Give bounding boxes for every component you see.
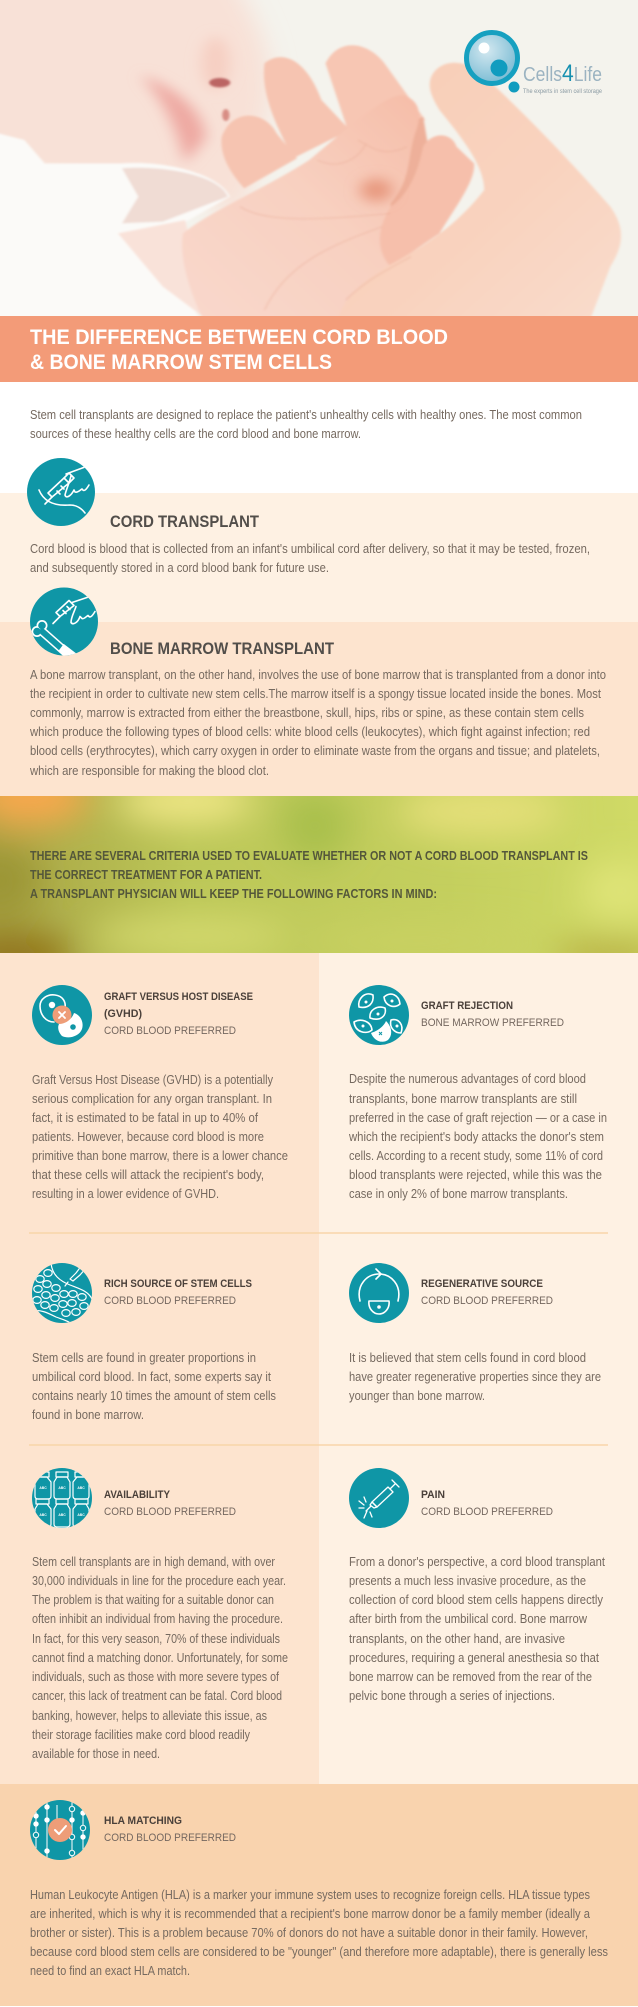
pain text: after birth from the umbilical cord. Bone marrow (349, 1612, 588, 1626)
bone marrow text: commonly, marrow is extracted from either the breastbone, skull, hips, ribs or spine, as these contain stem cells (30, 706, 584, 720)
availability text: often inhibit an individual from having the procedure. (32, 1612, 283, 1626)
bone marrow text (29, 668, 606, 778)
HLA text: need to find an exact HLA match. (30, 1964, 190, 1978)
availability text: Stem cell transplants are in high demand, with over (32, 1555, 275, 1569)
rich source text: umbilical cord blood. In fact, some experts say it (32, 1370, 271, 1384)
bone marrow text: which produce the following types of blood cells: white blood cells (leukocytes), which fight against infection; red (29, 725, 590, 739)
heading: graft rejection: GRAFT REJECTION (421, 1000, 513, 1012)
panel: criteria banner on blurred green background (0, 766, 638, 978)
heading: HLA matching: CORD BLOOD PREFERRED (104, 1832, 236, 1844)
graft rejection text: transplants, bone marrow transplants are still (349, 1092, 577, 1106)
icon: syringe and umbilical cord (27, 458, 95, 526)
title: & BONE MARROW STEM CELLS (30, 350, 332, 374)
heading: regenerative source: CORD BLOOD PREFERRED (421, 1295, 553, 1307)
intro text: sources of these healthy cells are the cord blood and bone marrow. (30, 427, 361, 441)
panel: factors left column background (0, 953, 319, 1784)
factor: pain (349, 1468, 605, 1703)
pain text: bone marrow can be removed from the rear of the (349, 1670, 592, 1684)
graft rejection text: case in only 2% of bone marrow transplants. (349, 1187, 568, 1201)
icon: storage vials: ABC (39, 1513, 47, 1517)
availability text: individuals, such as those with more severe types of (32, 1670, 279, 1684)
cord transplant text: and subsequently stored in a cord blood bank for future use. (30, 561, 329, 575)
icon: cells in blood vessel with syringe (32, 1263, 92, 1327)
availability text: The problem is that waiting for a suitable donor can (32, 1593, 274, 1607)
icon: storage vials: ABC (77, 1486, 85, 1490)
GVHD text: primitive than bone marrow, there is a lower chance (32, 1149, 288, 1163)
heading: regenerative source: REGENERATIVE SOURCE (421, 1278, 543, 1290)
cord transplant text (30, 542, 590, 575)
regenerative source text (349, 1351, 601, 1403)
icon: storage vials (32, 1468, 92, 1528)
heading: availability (104, 1489, 236, 1518)
GVHD text: patients. However, because cord blood is more (32, 1130, 264, 1144)
rich source text: found in bone marrow. (32, 1408, 144, 1422)
intro text: Stem cell transplants are designed to replace the patient's unhealthy cells with healthy ones. The most common (30, 408, 582, 422)
factor: rich source of stem cells (32, 1263, 276, 1422)
pain text: transplants, on the other hand, are invasive (349, 1632, 565, 1646)
title banner (0, 316, 638, 382)
cord transplant text: Cord blood is blood that is collected from an infant's umbilical cord after delivery, so that it may be tested, frozen, (30, 542, 590, 556)
panel: factors right column background (319, 953, 638, 1784)
title (30, 325, 448, 374)
graft rejection text: preferred in the case of graft rejection — or a case in (349, 1111, 607, 1125)
photo: baby's hand held in adult hand (0, 0, 638, 320)
icon: storage vials: ABC (39, 1486, 47, 1490)
heading: rich source (104, 1278, 252, 1307)
GVHD text: Graft Versus Host Disease (GVHD) is a potentially (32, 1073, 274, 1087)
title: THE DIFFERENCE BETWEEN CORD BLOOD (30, 325, 448, 349)
heading: cord transplant: CORD TRANSPLANT (110, 513, 259, 531)
heading: pain (421, 1489, 553, 1518)
graft rejection text: which the recipient's body attacks the donor's stem (348, 1130, 604, 1144)
criteria text (30, 848, 588, 901)
graft rejection text (348, 1072, 607, 1201)
availability text: banking, however, helps to alleviate this issue, as (32, 1709, 267, 1723)
icon: storage vials: ABC (77, 1513, 85, 1517)
regenerative source text: It is believed that stem cells found in cord blood (349, 1351, 586, 1365)
icon: storage vials: ABC (58, 1513, 66, 1517)
pain text: collection of cord blood stem cells happens directly (349, 1593, 604, 1607)
panel: bone marrow transplant (0, 588, 638, 796)
graft rejection text: blood transplants were rejected, while this was the (349, 1168, 602, 1182)
heading: availability: AVAILABILITY (104, 1489, 171, 1501)
heading: GVHD: (GVHD) (104, 1008, 142, 1020)
pain text (349, 1555, 605, 1703)
heading: graft rejection: BONE MARROW PREFERRED (421, 1017, 564, 1029)
availability text: 30,000 individuals in line for the procedure each year. (32, 1574, 286, 1588)
heading: rich source: RICH SOURCE OF STEM CELLS (104, 1278, 252, 1290)
GVHD text (32, 1073, 288, 1201)
heading: HLA matching (104, 1815, 236, 1844)
heading: graft rejection (421, 1000, 564, 1029)
heading: GVHD: GRAFT VERSUS HOST DISEASE (104, 991, 253, 1003)
heading: pain: CORD BLOOD PREFERRED (421, 1506, 553, 1518)
icon: syringe and bone (30, 588, 98, 656)
icon: storage vials: ABC (58, 1486, 66, 1490)
heading: pain: PAIN (421, 1489, 445, 1501)
regenerative source text: younger than bone marrow. (349, 1389, 485, 1403)
icon: graft rejection cells (349, 985, 409, 1045)
icon: DNA strands with check (30, 1800, 90, 1860)
panel: cord transplant (0, 458, 638, 622)
factor: availability (32, 1468, 288, 1761)
criteria text: THE CORRECT TREATMENT FOR A PATIENT. (30, 867, 262, 882)
availability text: cannot find a matching donor. Unfortunately, for some (32, 1651, 288, 1665)
criteria text: A TRANSPLANT PHYSICIAN WILL KEEP THE FOLLOWING FACTORS IN MIND: (30, 886, 437, 901)
pain text: procedures, requiring a general anesthesia so that (349, 1651, 599, 1665)
pain text: From a donor's perspective, a cord blood transplant (349, 1555, 605, 1569)
logo: Cells4Life: The experts in stem cell storage (523, 88, 602, 95)
pain text: pelvic bone through a series of injections. (349, 1689, 555, 1703)
pain text: presents a much less invasive procedure, as the (349, 1574, 586, 1588)
rich source text: contains nearly 10 times the amount of stem cells (32, 1389, 276, 1403)
factor: graft rejection (348, 985, 607, 1201)
availability text: cancer, this lack of treatment can be fatal. Cord blood (32, 1689, 282, 1703)
factor: graft versus host disease (32, 985, 288, 1201)
availability text: In fact, for this very season, 70% of these individuals (32, 1632, 280, 1646)
availability text: their storage facilities make cord blood readily (32, 1728, 251, 1742)
heading: GVHD: CORD BLOOD PREFERRED (104, 1025, 236, 1037)
heading: regenerative source (421, 1278, 553, 1307)
icon: regeneration arrow over cell (349, 1263, 409, 1323)
availability text (32, 1555, 288, 1761)
intro text (30, 408, 582, 441)
rich source text: Stem cells are found in greater proportions in (32, 1351, 256, 1365)
factor: regenerative source (349, 1263, 601, 1403)
HLA text (30, 1888, 608, 1978)
heading: HLA matching: HLA MATCHING (104, 1815, 182, 1827)
bone marrow text: which are responsible for making the blood clot. (29, 764, 269, 778)
heading: GVHD (104, 991, 253, 1037)
logo: Cells4Life (466, 32, 602, 95)
panel: HLA matching (0, 1784, 638, 2006)
icon: syringe with spark (349, 1468, 409, 1528)
graft rejection text: cells. According to a recent study, some 11% of cord (349, 1149, 603, 1163)
rich source text (32, 1351, 276, 1422)
heading: availability: CORD BLOOD PREFERRED (104, 1506, 236, 1518)
heading: rich source: CORD BLOOD PREFERRED (104, 1295, 236, 1307)
availability text: available for those in need. (32, 1747, 160, 1761)
regenerative source text: have greater regenerative properties since they are (349, 1370, 601, 1384)
GVHD text: that these cells will attack the recipient's body, (32, 1168, 264, 1182)
icon: GVHD cells (32, 985, 92, 1045)
GVHD text: serious complication for any organ transplant. In (32, 1092, 272, 1106)
heading: bone marrow transplant: BONE MARROW TRANSPLANT (110, 640, 334, 658)
GVHD text: resulting in a lower evidence of GVHD. (32, 1187, 219, 1201)
graft rejection text: Despite the numerous advantages of cord blood (349, 1072, 586, 1086)
GVHD text: fact, it is estimated to be fatal in up to 40% of (32, 1111, 258, 1125)
logo: Cells4Life: Cells4Life (523, 60, 602, 87)
